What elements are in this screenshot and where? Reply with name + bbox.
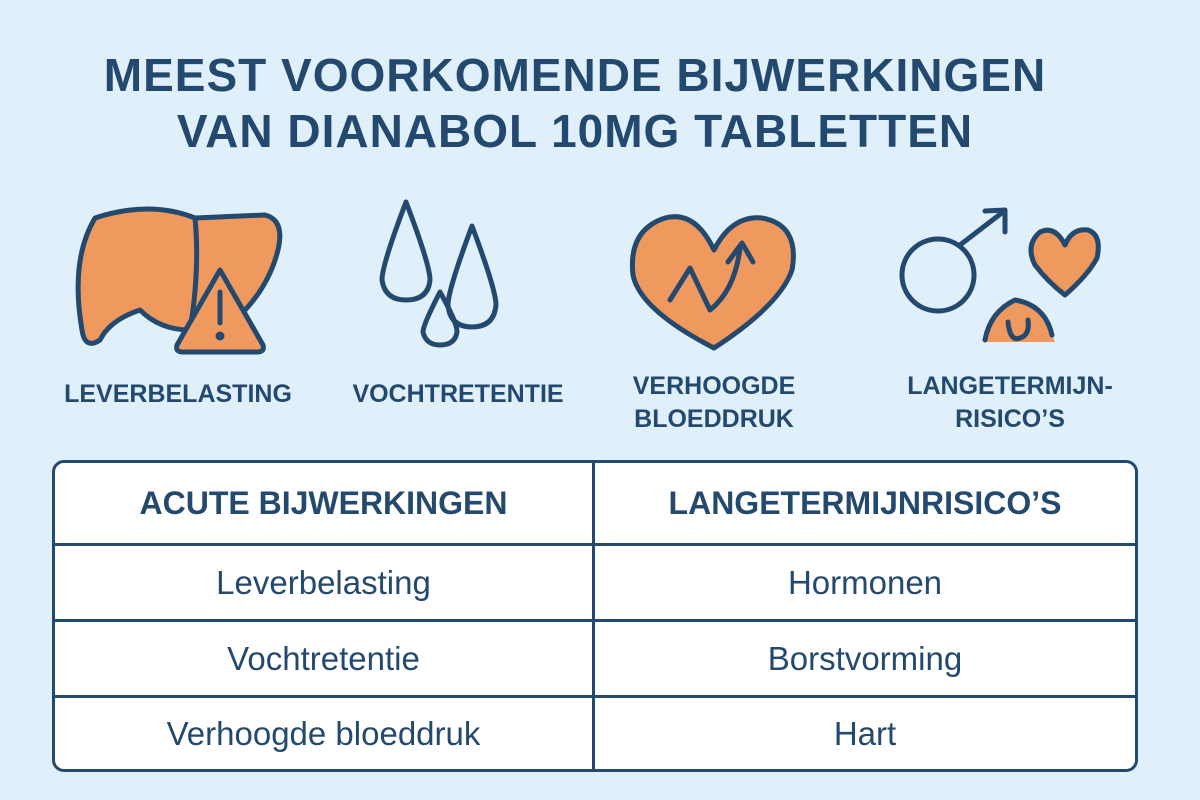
table: Hormonen [788,564,942,601]
label: Verhoogde bloeddruk [633,372,795,433]
table: LANGETERMIJNRISICO’S [669,484,1061,520]
label: Leverbelasting: LEVERBELASTING [64,380,292,408]
title: MEEST VOORKOMENDE BIJWERKINGEN [104,49,1046,101]
table [52,460,1138,772]
icon: gender and hearts [902,210,1098,342]
title [104,49,1046,157]
icon: water drops [382,202,496,345]
table: Verhoogde bloeddruk [167,715,480,752]
label: Verhoogde bloeddruk: BLOEDDRUK [634,405,794,433]
table: Vochtretentie [227,640,420,677]
table: ACUTE BIJWERKINGEN [139,484,508,520]
label: Langetermijnrisico's: LANGETERMIJN- [907,372,1113,400]
icon: heart with rising arrow [632,217,793,348]
icon: liver with warning [78,209,280,352]
label: Vochtretentie: VOCHTRETENTIE [352,380,564,408]
table: Hart [834,715,896,752]
label: Langetermijnrisico's: RISICO’S [955,405,1065,433]
label: Verhoogde bloeddruk: VERHOOGDE [633,372,795,400]
title: VAN DIANABOL 10MG TABLETTEN [177,105,973,157]
label: Langetermijnrisico's [907,372,1113,433]
table: Leverbelasting [216,564,431,601]
table: Borstvorming [768,640,962,677]
